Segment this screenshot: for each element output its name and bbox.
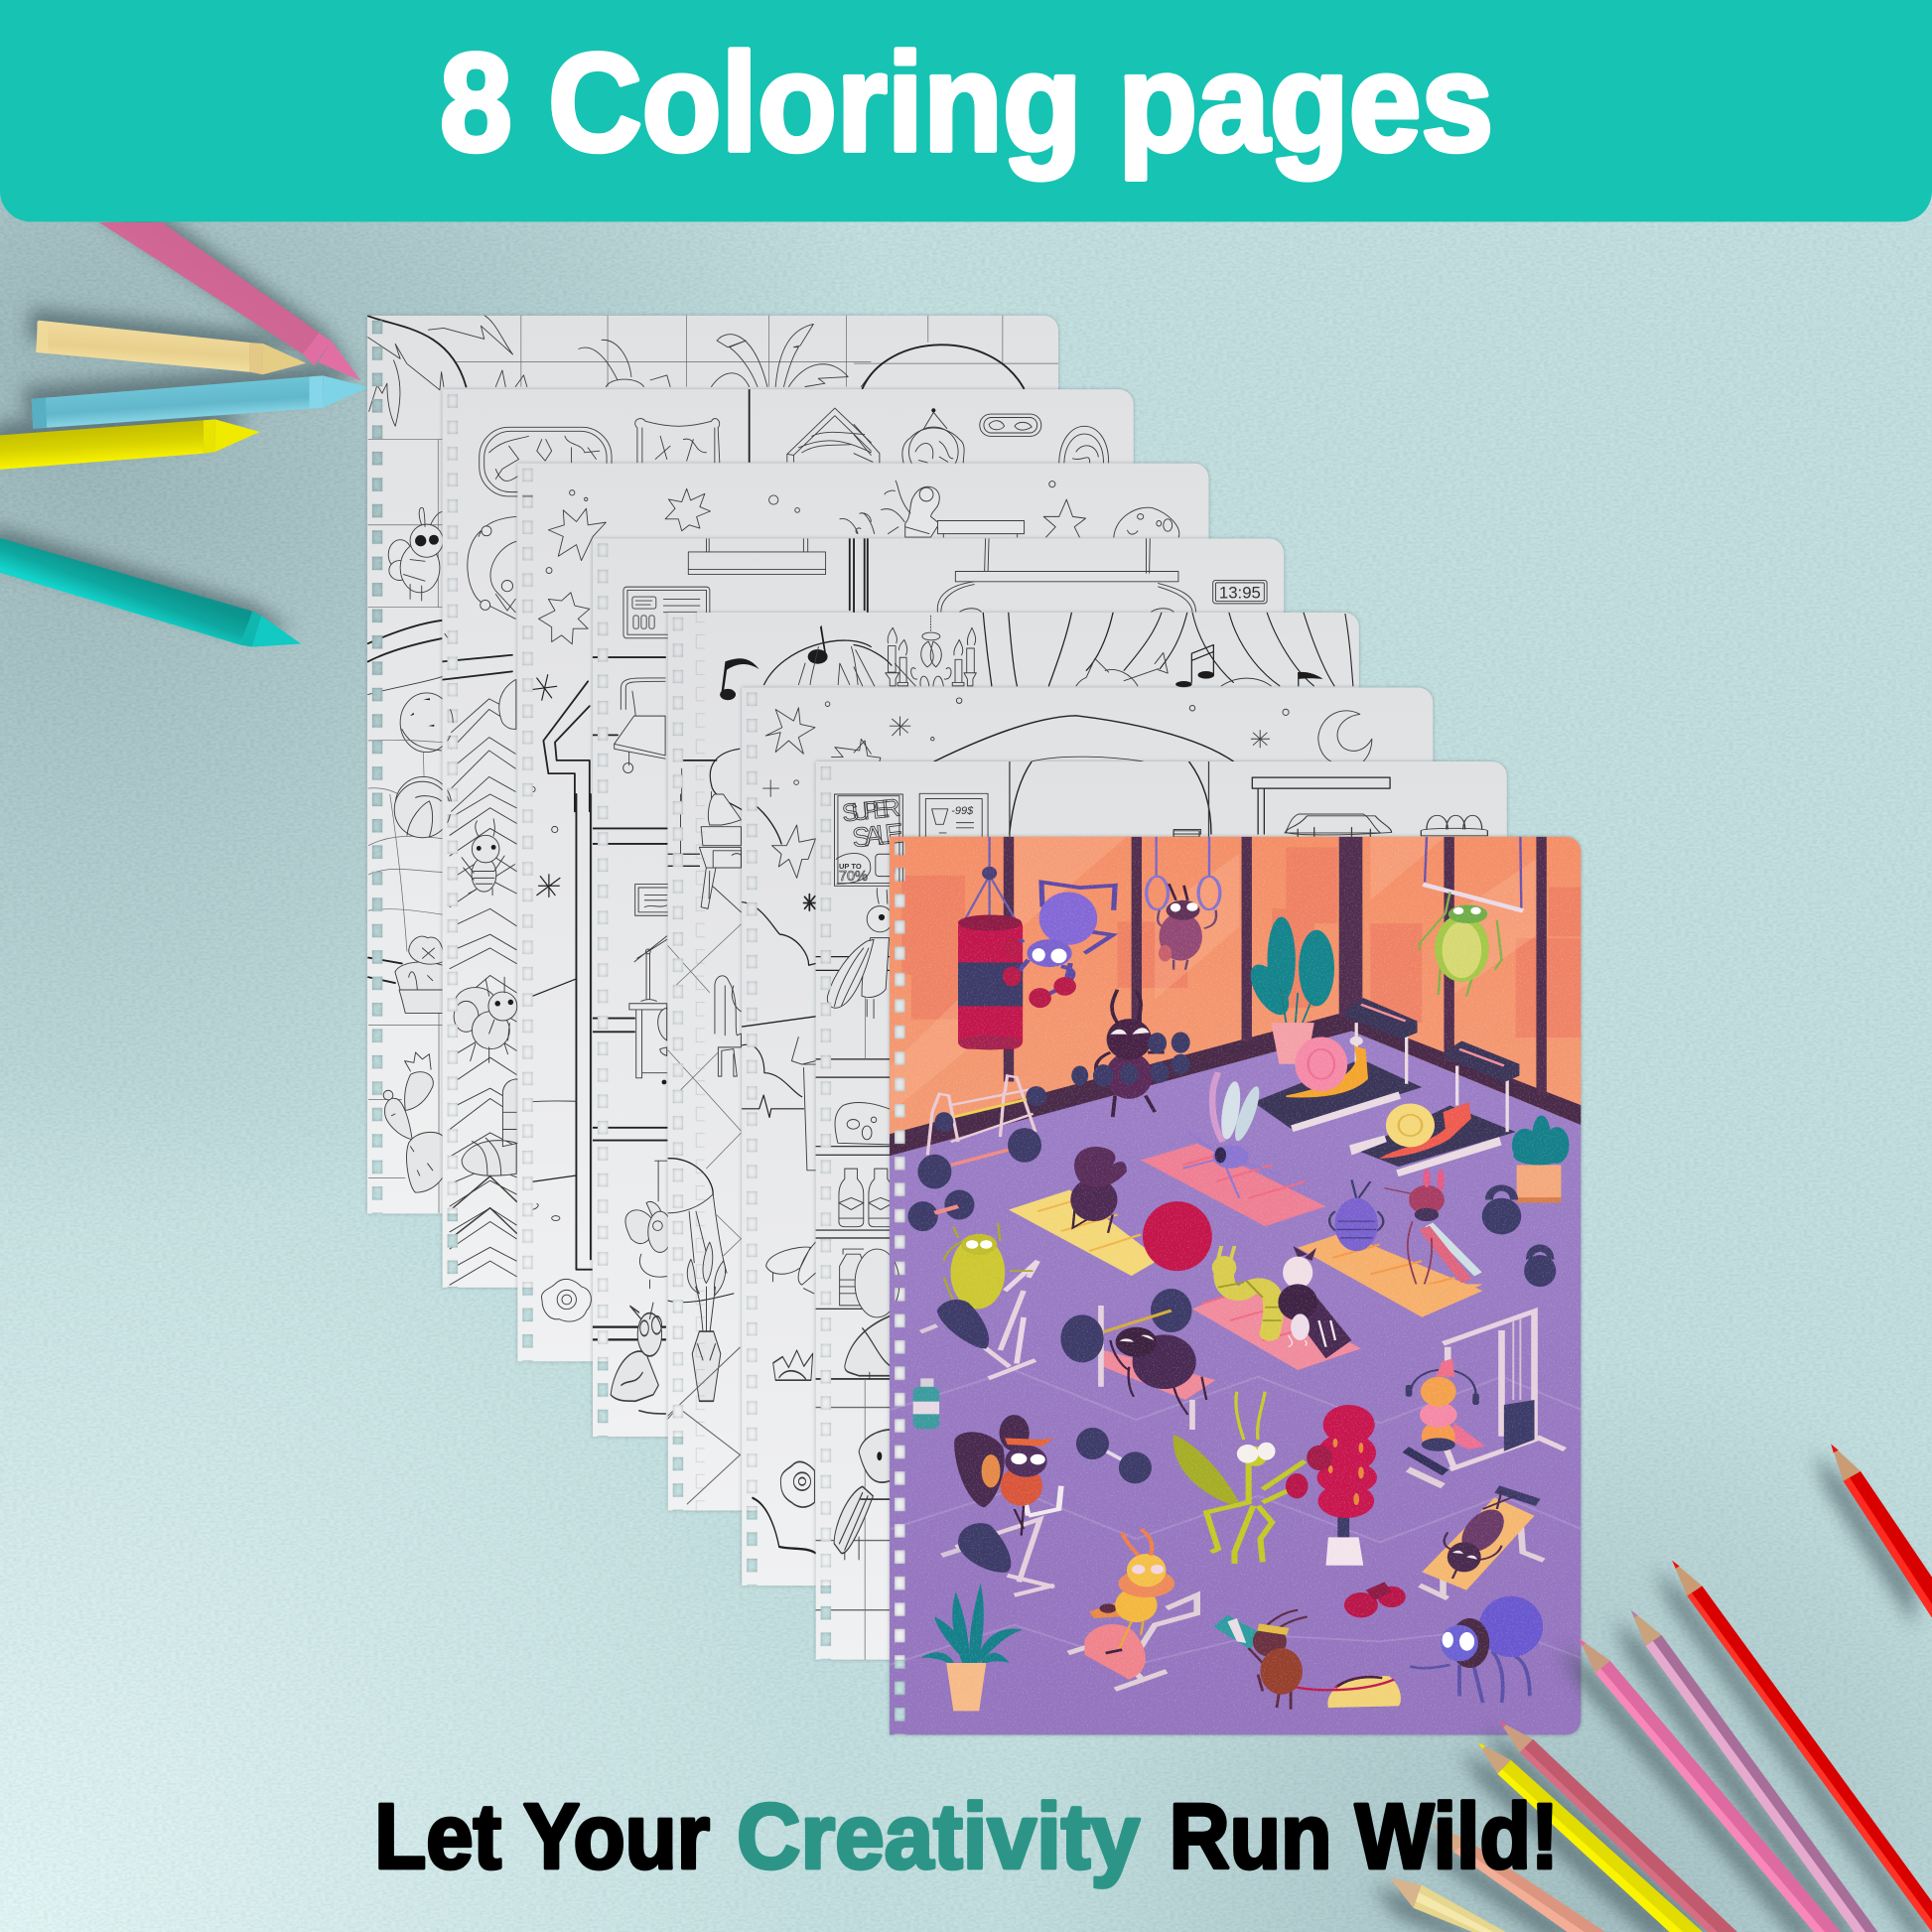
yoga mats xyxy=(1009,1144,1483,1317)
green bug on trapeze xyxy=(1420,837,1523,996)
right potted plant xyxy=(1512,1115,1569,1202)
boxing gloves on floor xyxy=(1344,1582,1406,1617)
colored pencils fan at bottom right xyxy=(1373,1445,1932,1932)
faint floor pattern xyxy=(891,1370,1582,1665)
clock readout: 13:95 xyxy=(1219,583,1261,602)
poster headline: SUPER xyxy=(841,795,901,828)
crayons: five wax crayons at top left xyxy=(0,209,369,647)
title: 8 Coloring pages xyxy=(440,24,1493,180)
yellow-green bug on elliptical xyxy=(944,1223,1037,1363)
stag beetle lifting dumbbells xyxy=(1071,990,1190,1117)
dark beetle on yellow mat xyxy=(1070,1147,1127,1233)
potted plant on wall xyxy=(1243,916,1334,1064)
gym floor xyxy=(888,1031,1586,1740)
ant drinking with gym bag xyxy=(1213,1610,1401,1710)
tagline highlight word: Creativity xyxy=(737,1784,1140,1887)
red standing punching bag xyxy=(1286,1405,1377,1566)
sheet 1: pool scene coloring page xyxy=(367,313,1058,1213)
crayon: yellow xyxy=(0,419,260,470)
gym wall xyxy=(888,834,1586,1159)
pencil: cream xyxy=(1390,1877,1506,1932)
window posts xyxy=(1004,837,1547,1095)
praying mantis xyxy=(1173,1392,1305,1564)
red mosquito xyxy=(1385,1169,1478,1294)
pencil: salmon xyxy=(1432,1824,1605,1932)
barbell rack xyxy=(907,1075,1046,1231)
beetle on rings xyxy=(1147,837,1220,970)
pencil: rose xyxy=(1499,1721,1737,1932)
sheet 8: colored gym illustration on top xyxy=(888,834,1586,1740)
banner: teal header xyxy=(0,0,1932,221)
pencil: pink xyxy=(1579,1638,1841,1932)
pencil: mauve xyxy=(1631,1610,1877,1932)
moth on exercise bike xyxy=(1068,1529,1197,1690)
wall base band xyxy=(888,1013,1586,1157)
punching bag xyxy=(958,837,1023,1049)
bench press beetle xyxy=(1060,1289,1216,1430)
sheet 7: supermarket coloring page xyxy=(810,761,1507,1661)
blue spider xyxy=(1410,1596,1543,1703)
mosquito on pink mat xyxy=(1183,1072,1282,1198)
red exercise ball xyxy=(1143,1201,1212,1271)
sheet 5: concert hall coloring page xyxy=(667,613,1359,1511)
pencil: red far right xyxy=(1831,1445,1932,1618)
crayon: pink xyxy=(99,222,360,380)
sheet 2: gallery scene coloring page xyxy=(434,388,1134,1288)
kettlebells xyxy=(1482,1184,1556,1287)
gym grain texture xyxy=(890,837,1581,1734)
pencil: yellow xyxy=(1477,1742,1703,1932)
poster price: -99$ xyxy=(951,805,974,817)
water bottle xyxy=(913,1378,939,1429)
pencil: red xyxy=(1672,1561,1932,1932)
purple spider with gloves xyxy=(1003,882,1115,1008)
crayon: teal xyxy=(0,538,301,647)
cable machine with orange bug xyxy=(1406,1311,1565,1486)
bottom left potted plant xyxy=(920,1584,1023,1711)
tagline xyxy=(374,1784,1559,1887)
tagline ending: Run Wild! xyxy=(1170,1784,1559,1887)
blue meditating bug xyxy=(1329,1179,1383,1251)
dumbbell on floor xyxy=(1076,1428,1152,1483)
elliptical machine top xyxy=(920,1291,1035,1378)
poster percent: 70% xyxy=(839,869,868,885)
treadmills with snails xyxy=(1253,998,1519,1176)
poster sale word: SALE xyxy=(851,817,904,853)
pink mat with caterpillar and moth xyxy=(1192,1246,1361,1370)
incline bench with beetle xyxy=(1420,1489,1544,1598)
orange mat tail xyxy=(1380,1284,1483,1312)
sheet 4: studio room coloring page xyxy=(591,536,1284,1437)
crayon: blue xyxy=(32,375,369,429)
tagline: Let Your xyxy=(374,1784,710,1887)
sheet 3: space scene coloring page xyxy=(517,464,1208,1361)
sheet 6: night sky coloring page xyxy=(730,688,1433,1586)
poster discount: UP TO xyxy=(839,862,862,871)
crayon: tan xyxy=(36,321,306,374)
butterfly on elliptical xyxy=(941,1415,1061,1595)
